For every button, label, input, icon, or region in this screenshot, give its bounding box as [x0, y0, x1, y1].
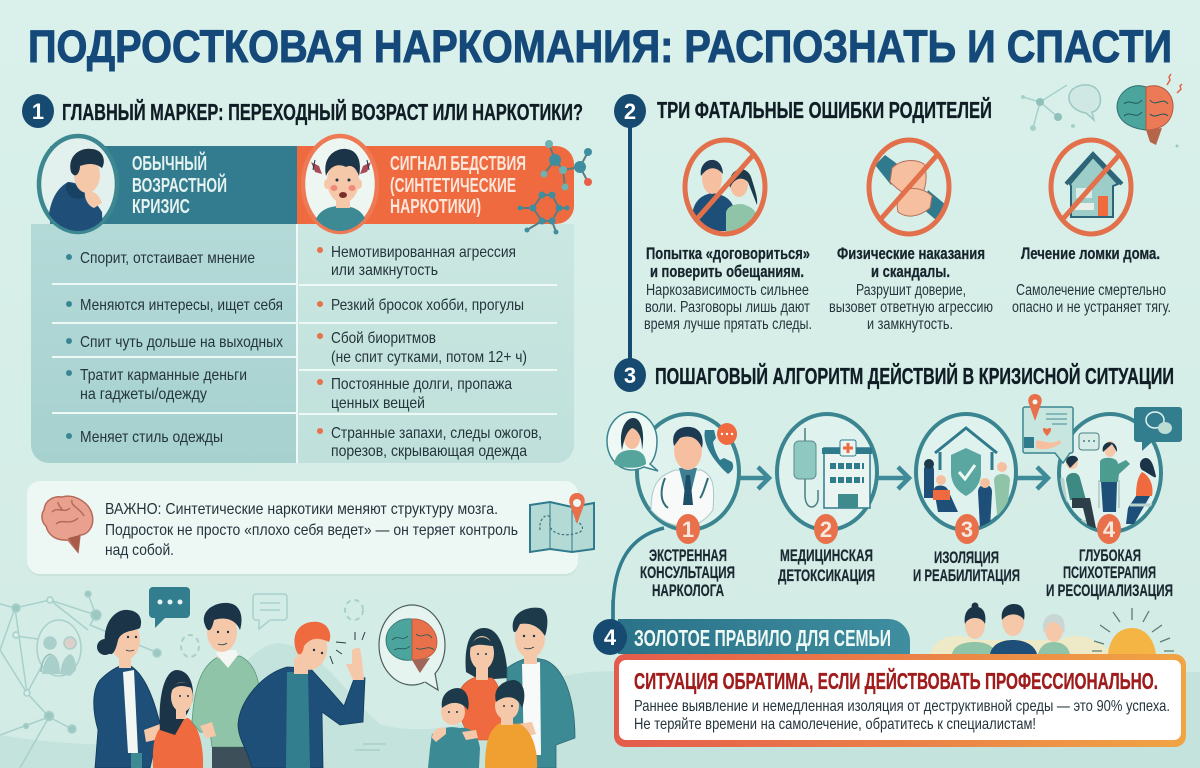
- number 1: 1: [682, 517, 694, 542]
- list: distress signs: или замкнутость: [331, 262, 438, 279]
- card text: и поверить обещаниям.: [650, 263, 804, 281]
- list: distress signs: Резкий бросок хобби, прогулы: [331, 297, 524, 314]
- card text: воли. Разговоры лишь дают: [645, 299, 810, 316]
- person: father in teal jacket: [507, 608, 575, 768]
- number 2: 2: [820, 517, 832, 542]
- list: ordinary crisis signs: Спит чуть дольше на выходных: [80, 334, 283, 351]
- icon: no house: [1051, 140, 1131, 234]
- list: ordinary crisis signs: Спорит, отстаивает мнение: [80, 250, 255, 267]
- card text: [644, 245, 812, 333]
- list: ordinary crisis signs: [66, 250, 283, 446]
- dash marks: [355, 744, 386, 750]
- illustration background hills: [0, 643, 1200, 768]
- list: distress signs: Странные запахи, следы ожогов,: [331, 425, 542, 442]
- number 4: [1097, 514, 1121, 544]
- icon: chat bubble: [1134, 407, 1182, 451]
- number badge 4: 4: [604, 625, 617, 650]
- speech bubble light: [253, 594, 287, 629]
- card: home treatment: [1012, 140, 1171, 316]
- card text: Разрушит доверие,: [856, 282, 966, 299]
- card text: [829, 245, 993, 333]
- number 2: [814, 514, 838, 544]
- illustration: families: [0, 587, 575, 768]
- list: distress signs: [317, 244, 542, 460]
- step label: [913, 549, 1020, 585]
- step label: И РЕАБИЛИТАЦИЯ: [913, 567, 1020, 585]
- step label: [640, 547, 735, 600]
- person: father in green sweater: [192, 603, 260, 768]
- list: distress signs: (не спит сутками, потом 12+ ч): [331, 349, 527, 366]
- step label: [1046, 547, 1173, 600]
- section 4: golden rule: [593, 600, 1186, 747]
- list: distress signs: ценных вещей: [331, 395, 425, 412]
- avatar: ordinary teen: [39, 136, 117, 235]
- header band right: [297, 146, 574, 224]
- step label: МЕДИЦИНСКАЯ: [780, 547, 873, 565]
- arrow 1: [740, 467, 769, 489]
- step label: ГЛУБОКАЯ: [1079, 547, 1141, 565]
- person: mother: [94, 610, 168, 768]
- icon: two-tone brain: [1117, 74, 1182, 148]
- header label: ordinary crisis: ОБЫЧНЫЙ: [132, 151, 207, 175]
- rule text: [634, 698, 1170, 733]
- number badge 2: [614, 94, 646, 128]
- header label: distress signal: (СИНТЕТИЧЕСКИЕ: [390, 175, 516, 197]
- heading 2: ТРИ ФАТАЛЬНЫЕ ОШИБКИ РОДИТЕЛЕЙ: [657, 96, 992, 123]
- number badge 4: [593, 600, 627, 655]
- icon: doctor: [651, 427, 714, 526]
- card text: Попытка «договориться»: [646, 245, 810, 263]
- list: ordinary crisis signs: Меняет стиль одежды: [80, 429, 223, 446]
- card text: вызовет ответную агрессию: [829, 299, 993, 316]
- header label: ordinary crisis: ВОЗРАСТНОЙ: [132, 173, 227, 197]
- icon: woman bubble: [607, 412, 658, 471]
- icon: therapy group: [1062, 433, 1158, 528]
- step label: ПСИХОТЕРАПИЯ: [1063, 564, 1156, 582]
- step label: ДЕТОКСИКАЦИЯ: [778, 567, 875, 585]
- card text: Лечение ломки дома.: [1021, 245, 1160, 263]
- rule text: Не теряйте времени на самолечение, обратитесь к специалистам!: [634, 716, 1036, 733]
- number badge 3: [614, 358, 646, 392]
- person: girl: [153, 670, 203, 768]
- step 1: narcologist: [607, 412, 739, 600]
- step label: ЭКСТРЕННАЯ: [649, 547, 727, 565]
- header label: distress signal: СИГНАЛ БЕДСТВИЯ: [390, 153, 526, 175]
- heading 1: ГЛАВНЫЙ МАРКЕР: ПЕРЕХОДНЫЙ ВОЗРАСТ ИЛИ НАРКОТИКИ?: [62, 98, 583, 125]
- icon: heart card with pin: [1023, 394, 1073, 463]
- list: distress signs: порезов, скрывающая одежда: [331, 443, 527, 460]
- card: negotiating: [644, 140, 812, 333]
- header label: distress signal: НАРКОТИКИ): [390, 196, 481, 218]
- step label: КОНСУЛЬТАЦИЯ: [640, 564, 735, 582]
- header label: distress signal: [390, 153, 526, 218]
- number badge 2: 2: [624, 99, 636, 124]
- list: distress signs: Постоянные долги, пропажа: [331, 376, 512, 393]
- list: ordinary crisis signs: Меняются интересы, ищет себя: [80, 297, 283, 314]
- list: ordinary crisis signs: на гаджеты/одежду: [80, 386, 207, 403]
- step 3: isolation: [913, 414, 1020, 585]
- table body left: [31, 224, 297, 463]
- number 3: [955, 514, 979, 544]
- decoration: network and pale brain: [1021, 85, 1100, 131]
- icon: molecules: [518, 140, 592, 234]
- person: younger boy: [428, 688, 480, 768]
- card text: [1012, 245, 1171, 316]
- step label: [778, 547, 875, 585]
- list: ordinary crisis signs: Тратит карманные деньги: [80, 367, 247, 384]
- important text: ВАЖНО: Синтетические наркотики меняют структуру мозга.: [105, 501, 498, 518]
- icon: no fists: [869, 140, 949, 234]
- number badge 1: 1: [32, 99, 44, 124]
- step 2: detox: [777, 414, 877, 585]
- person: older boy: [485, 680, 537, 768]
- number badge 1: [22, 94, 54, 128]
- card text: Наркозависимость сильнее: [646, 282, 809, 299]
- comparison table: [31, 136, 592, 463]
- section 2: parental mistakes: [614, 74, 1182, 364]
- tab heading: ЗОЛОТОЕ ПРАВИЛО ДЛЯ СЕМЬИ: [634, 625, 891, 651]
- rule box: [614, 654, 1186, 747]
- timeline line: [628, 125, 632, 364]
- connector curve to section 4: [613, 528, 664, 625]
- list: distress signs: Сбой биоритмов: [331, 330, 436, 347]
- icon: map with pin: [530, 493, 594, 552]
- card text: время лучше прятать следы.: [644, 316, 812, 333]
- card text: Физические наказания: [837, 245, 985, 263]
- speech bubble with brain: [379, 605, 445, 690]
- arrow 3: [1017, 467, 1048, 489]
- card text: и скандалы.: [871, 263, 950, 281]
- important text: Подросток не просто «плохо себя ведет» — он теряет контроль: [105, 522, 518, 539]
- card text: Самолечение смертельно: [1016, 282, 1166, 299]
- person: mother in orange: [458, 628, 508, 740]
- card: punishment: [829, 140, 993, 333]
- icon: IV bag and hospital: [794, 428, 872, 508]
- section 3: step-by-step algorithm: [607, 358, 1182, 625]
- important text: над собой.: [105, 542, 174, 559]
- arrow 2: [878, 467, 909, 489]
- speech bubble dark: [149, 587, 190, 628]
- avatar: distressed teen: [303, 136, 377, 232]
- important text: [105, 501, 518, 559]
- step label: ИЗОЛЯЦИЯ: [934, 549, 999, 567]
- family and sun decoration: [930, 602, 1174, 654]
- step 4: psychotherapy: [1023, 394, 1182, 600]
- step label: НАРКОЛОГА: [652, 582, 724, 600]
- icon: phone: [704, 423, 737, 474]
- header label: ordinary crisis: КРИЗИС: [132, 196, 190, 218]
- header label: ordinary crisis: [132, 151, 227, 218]
- dashed circles: [181, 600, 363, 657]
- number 1: [676, 514, 700, 544]
- icon: no parents: [685, 140, 765, 234]
- callout: important: [27, 481, 594, 576]
- number 3: 3: [961, 517, 973, 542]
- icon: brain: [42, 496, 93, 552]
- number badge 3: 3: [624, 363, 636, 388]
- tab heading: [618, 619, 910, 654]
- icon: shelter and group: [924, 428, 1010, 528]
- table body right: [297, 224, 574, 463]
- network graphic: [0, 591, 161, 768]
- person: teen with raised hand: [238, 622, 365, 768]
- card text: и замкнутость.: [867, 316, 953, 333]
- number 4: 4: [1103, 517, 1116, 542]
- section 1: main marker: [22, 94, 592, 463]
- list: distress signs: Немотивированная агрессия: [331, 244, 516, 261]
- header band left: [50, 146, 297, 224]
